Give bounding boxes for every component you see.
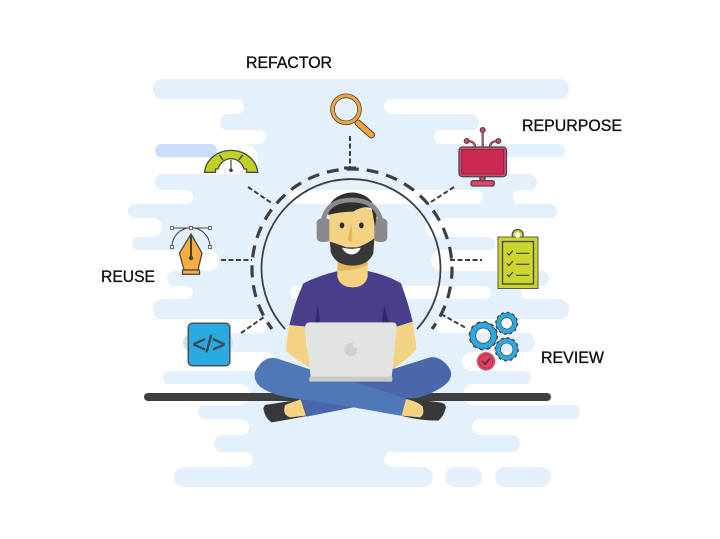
icon: monitor <box>459 128 506 186</box>
icon: pen tool <box>170 226 212 274</box>
cloud background <box>0 79 720 487</box>
solid arc around the person <box>262 179 440 329</box>
label: refactor: REFACTOR <box>246 54 332 72</box>
icon: code window: </> <box>192 331 226 357</box>
connector: repurpose <box>428 187 454 204</box>
label: reuse: REUSE <box>101 268 155 286</box>
connector: checklist <box>450 259 482 261</box>
connector: refactor <box>344 136 356 168</box>
connector: speed gauge <box>248 187 273 204</box>
icon: magnifying glass <box>332 96 372 135</box>
arms <box>286 322 417 370</box>
neck <box>337 260 368 287</box>
connector: code <box>241 317 264 333</box>
t-shirt <box>289 271 413 327</box>
label: review: REVIEW <box>541 349 604 367</box>
back leg <box>301 357 451 417</box>
label: repurpose: REPURPOSE <box>522 117 622 135</box>
head <box>317 193 387 266</box>
dashed outer arc <box>252 169 452 329</box>
front leg <box>255 358 406 416</box>
icon: code window <box>188 323 230 366</box>
left shoe and foot <box>263 399 307 422</box>
icon: speed gauge <box>204 150 258 172</box>
person working on a laptop <box>255 193 451 422</box>
connector: reuse <box>221 259 252 261</box>
laptop <box>305 322 397 382</box>
right shoe and foot <box>402 398 446 421</box>
floor line <box>144 393 551 401</box>
icon: gears with check badge <box>470 313 518 370</box>
icon: checklist clipboard <box>498 230 538 288</box>
connector: review <box>441 314 466 328</box>
